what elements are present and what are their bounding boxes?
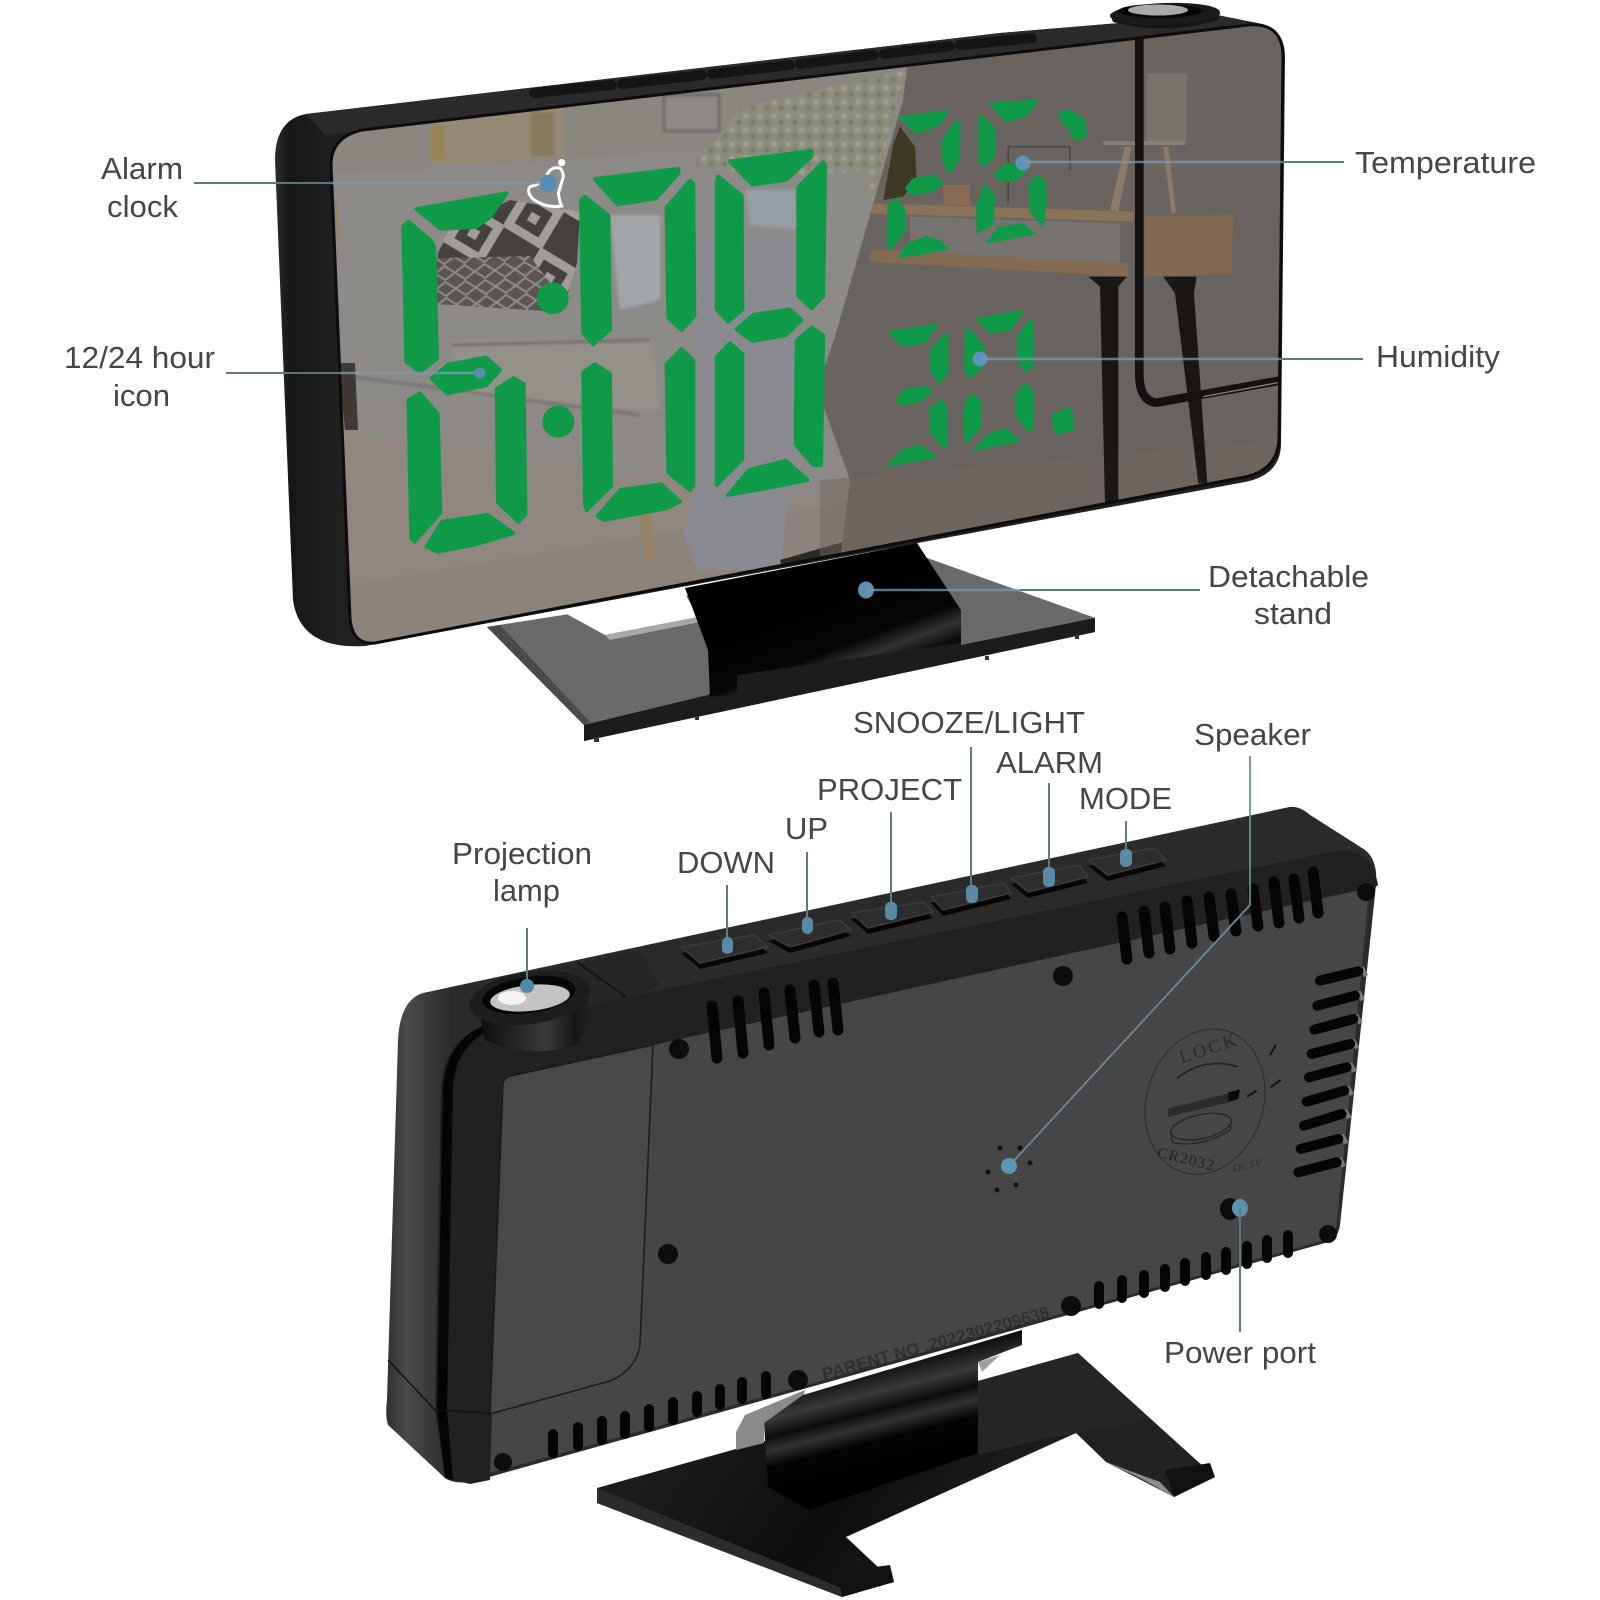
callout: PROJECT button: PROJECT [817, 772, 962, 807]
callout: DOWN button: DOWN [677, 845, 775, 880]
callout: MODE button: MODE [1079, 781, 1172, 816]
callout: humidity: Humidity [1376, 339, 1500, 374]
callout: speaker [1001, 717, 1311, 1174]
callout: alarm clock [101, 151, 540, 224]
power port [1220, 1198, 1240, 1220]
callout: detachable stand: Detachable [1208, 559, 1369, 594]
top face of the body [306, 15, 1262, 135]
knitted throw [683, 399, 796, 570]
callout: projection lamp [452, 836, 592, 993]
mirror display with room reflection [320, 13, 1290, 680]
speaker holes [986, 1146, 1032, 1192]
callout: UP button [785, 811, 828, 934]
clock body [275, 15, 1285, 646]
detachable stand, rear [597, 1330, 1215, 1597]
screw holes [494, 883, 1375, 1471]
rear view of the clock [386, 807, 1378, 1597]
projection lens, front top [1110, 1, 1220, 29]
callout: speaker: Speaker [1194, 717, 1311, 752]
callout: temperature: Temperature [1355, 145, 1536, 180]
callout: projection lamp: Projection [452, 836, 592, 871]
battery lock embossing: LOCK [1177, 1029, 1242, 1068]
rear buttons [681, 848, 1166, 969]
vents, right side [1298, 967, 1366, 1172]
callout: detachable stand: stand [1254, 596, 1332, 631]
callout: 12/24 hour icon: icon [113, 378, 170, 413]
battery door [490, 1045, 653, 1414]
top face with buttons [580, 807, 1365, 1000]
callout: 12/24 hour icon: 12/24 hour [64, 340, 215, 375]
callout: PROJECT button [817, 772, 962, 920]
callout: alarm clock: clock [107, 189, 178, 224]
top buttons, front [534, 38, 1032, 93]
rear housing [386, 807, 1376, 1482]
humidity digits [888, 311, 1073, 465]
detachable stand, front [487, 543, 1095, 742]
callout: UP button: UP [785, 811, 828, 846]
icon: alarm bell [529, 159, 565, 206]
back panel [490, 888, 1369, 1473]
vents, bottom left [553, 1376, 766, 1453]
projection lamp [466, 964, 594, 1051]
dark frame band [435, 850, 1378, 1484]
callout: power port: Power port [1164, 1335, 1316, 1370]
temperature digits [888, 101, 1085, 257]
callout: 12/24 hour icon [64, 340, 476, 413]
callout: MODE button [1079, 781, 1172, 867]
callout: alarm clock: Alarm [101, 151, 183, 186]
callout: power port [1164, 1199, 1316, 1370]
callout: projection lamp: lamp [493, 873, 560, 908]
callout: SNOOZE/LIGHT button: SNOOZE/LIGHT [853, 705, 1085, 740]
battery lock embossing: CR2032 [1156, 1144, 1217, 1175]
battery lock embossing [1127, 1013, 1283, 1190]
callout: ALARM button [996, 745, 1103, 887]
callout: temperature [1016, 145, 1536, 180]
callout: SNOOZE/LIGHT button [853, 705, 1085, 903]
callout: humidity [972, 339, 1500, 374]
vents, bottom right [1099, 1235, 1288, 1304]
callout: detachable stand [858, 559, 1369, 631]
vents, upper left [712, 983, 838, 1058]
battery lock embossing: DC.5V [1231, 1157, 1264, 1175]
large time digits [403, 151, 825, 552]
icon: 12/24 hour marker [474, 368, 486, 378]
vents, upper right [1122, 872, 1318, 959]
throw pillow [436, 200, 580, 312]
callout: ALARM button: ALARM [996, 745, 1103, 780]
parent number embossing: PARENT NO .2022302209638 [820, 1303, 1052, 1384]
front view of the clock [275, 1, 1290, 742]
callout: DOWN button [677, 845, 775, 954]
darker wall on the right [817, 20, 1290, 560]
